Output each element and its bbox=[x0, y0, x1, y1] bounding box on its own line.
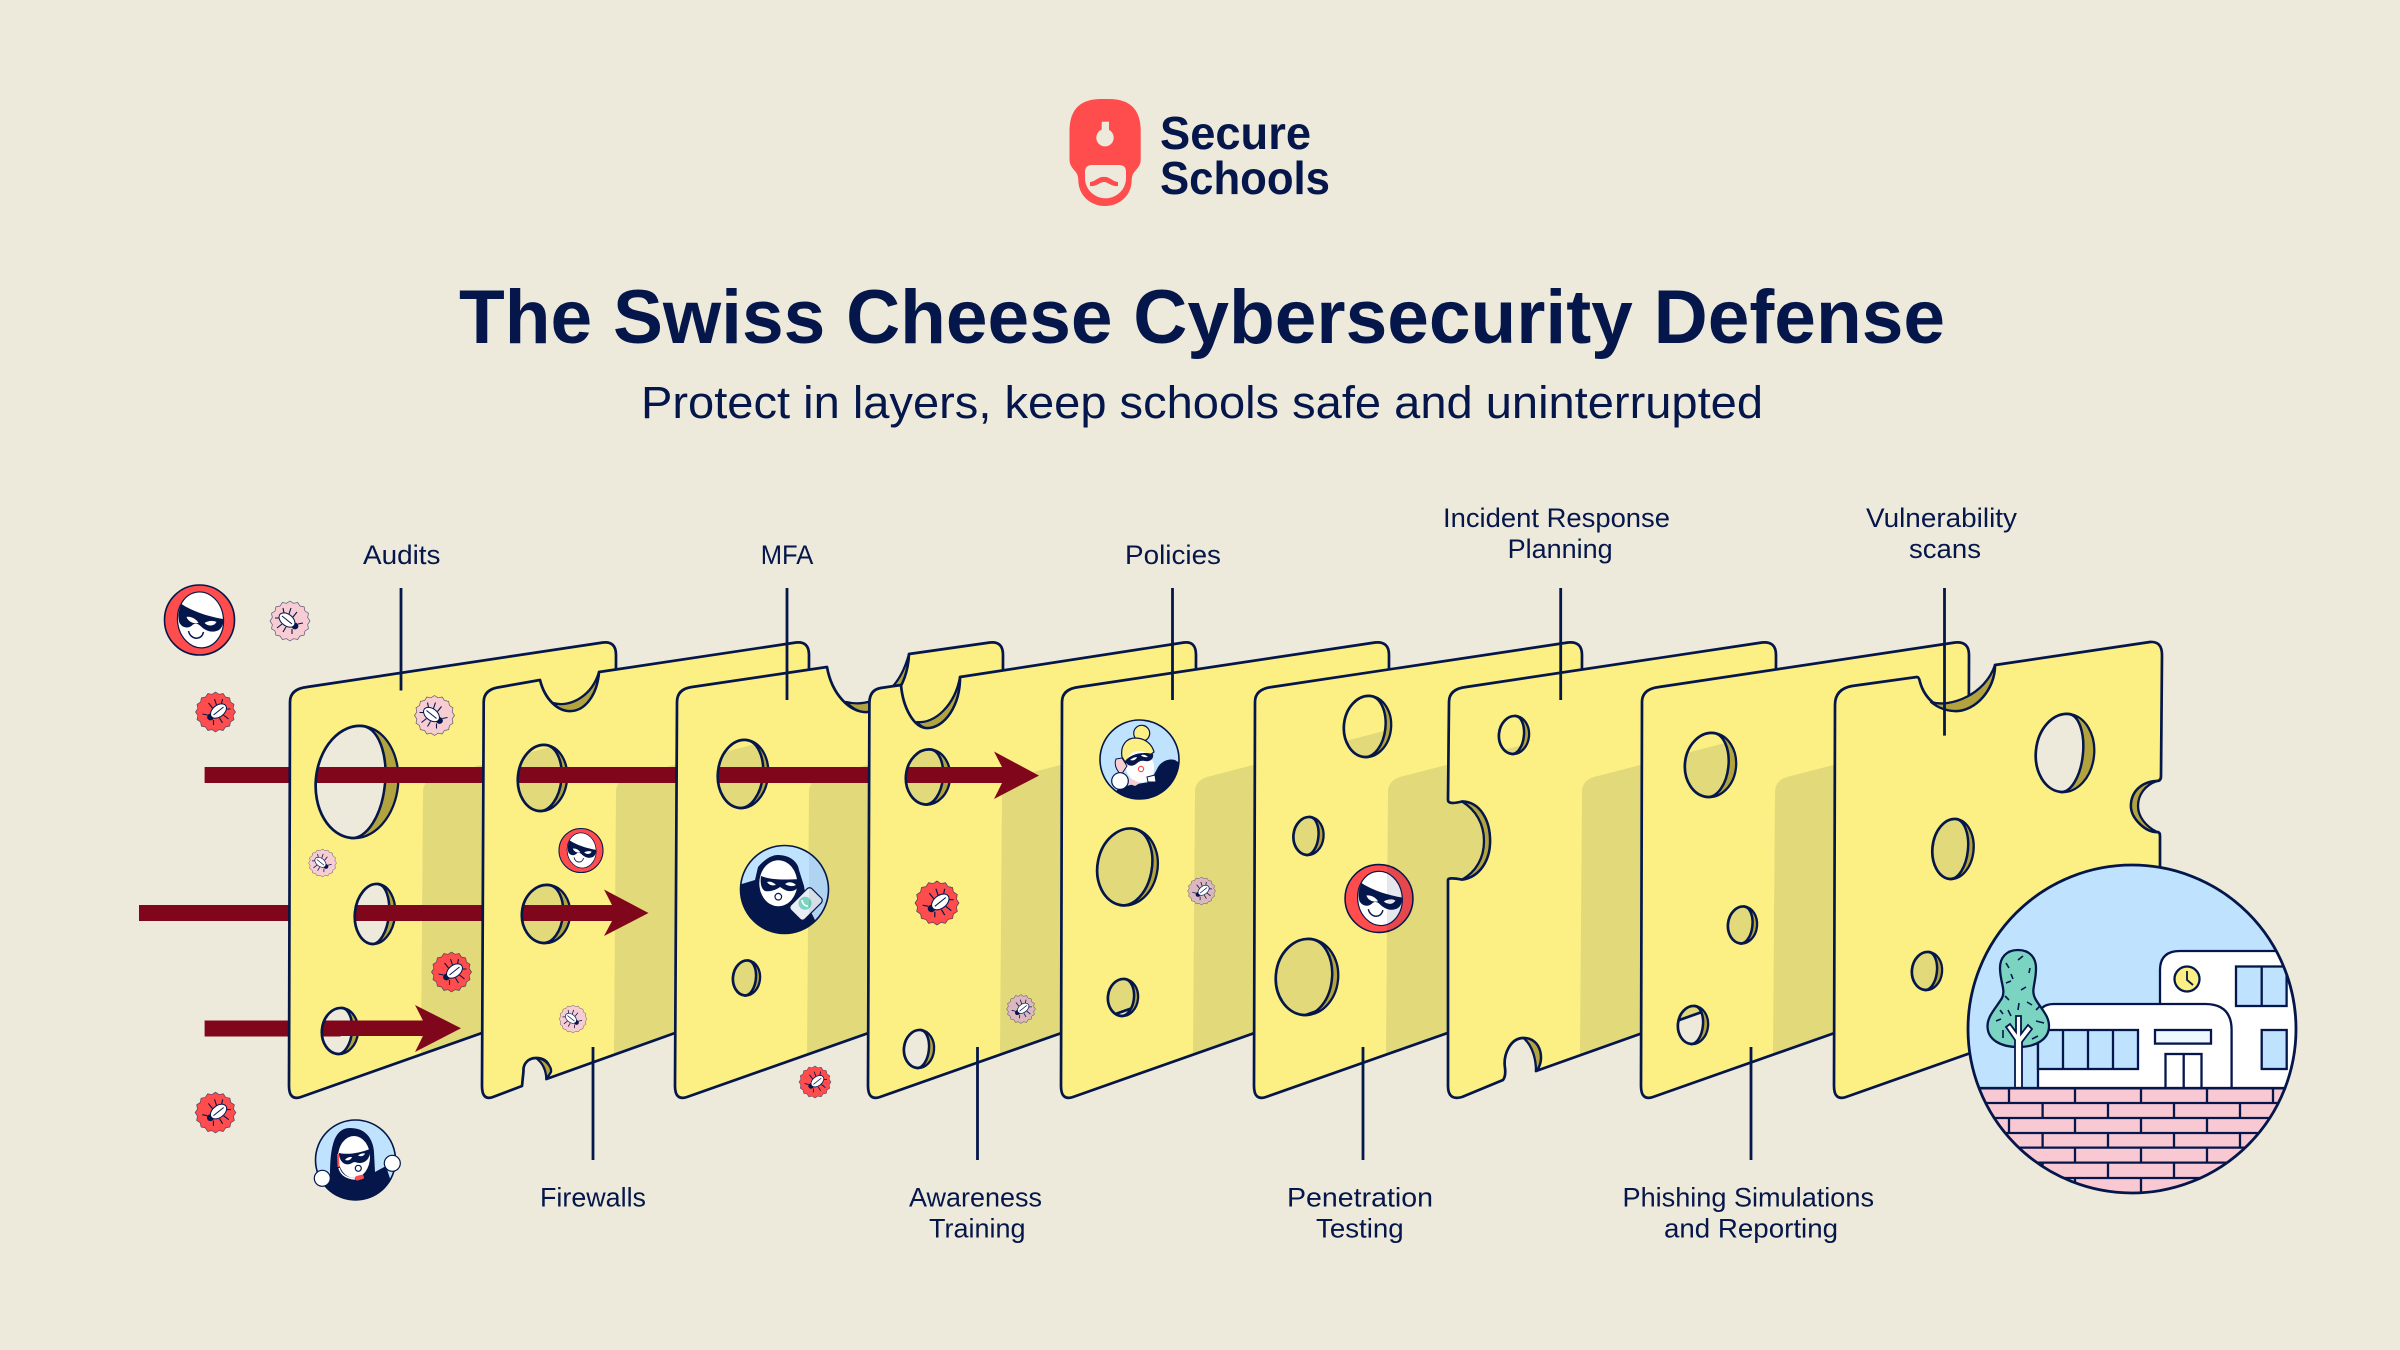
icon: bug red on awareness layer bbox=[915, 881, 959, 925]
label: Penetration Testing bbox=[1287, 1182, 1433, 1244]
label: Vulnerability scans: Vulnerability bbox=[1866, 503, 2018, 533]
cheese layer 7 bbox=[1448, 642, 1776, 1098]
icon: thief on firewalls layer bbox=[559, 828, 603, 873]
subtitle: Protect in layers, keep schools safe and uninterrupted bbox=[641, 377, 1763, 428]
label: Penetration Testing: Testing bbox=[1316, 1214, 1404, 1244]
arrow 3 entering bbox=[205, 1020, 341, 1036]
icon: thief top left bbox=[164, 585, 234, 655]
logo: Secure Schools: Secure bbox=[1160, 107, 1311, 159]
label: Phishing Simulations and Reporting bbox=[1622, 1182, 1874, 1244]
label: Awareness Training bbox=[909, 1182, 1042, 1244]
label: MFA: MFA bbox=[761, 540, 814, 570]
cheese layer 1 bbox=[289, 642, 616, 1098]
label: Phishing Simulations and Reporting: and Reporting bbox=[1664, 1214, 1838, 1244]
cheese layer 5 bbox=[1061, 642, 1389, 1098]
icon: bug shaded on awareness layer bbox=[1007, 995, 1035, 1023]
icon: thief with phone bbox=[735, 846, 828, 940]
label: Awareness Training: Training bbox=[929, 1214, 1026, 1244]
cheese layer 2 bbox=[482, 642, 809, 1098]
icon: bug pink top bbox=[270, 601, 310, 641]
icon: bug pink small bbox=[308, 849, 336, 877]
label: Vulnerability scans: scans bbox=[1909, 534, 1981, 564]
cheese layer 6 bbox=[1254, 642, 1582, 1098]
label: Firewalls: Firewalls bbox=[540, 1182, 646, 1212]
icon: bug red bottom bbox=[195, 1092, 236, 1133]
icon: bug red below MFA layer bbox=[799, 1066, 831, 1098]
illustration: school in circle bbox=[1960, 865, 2310, 1198]
icon: thief with headset bbox=[314, 1120, 400, 1210]
logo: Secure Schools: Schools bbox=[1160, 152, 1330, 204]
icon: blonde thief on phone bbox=[1099, 719, 1180, 800]
label: Incident Response Planning: Incident Response bbox=[1443, 503, 1670, 533]
logo: Secure Schools bbox=[1070, 99, 1330, 206]
label: Penetration Testing: Penetration bbox=[1287, 1182, 1433, 1212]
cheese layer 8 bbox=[1641, 642, 1969, 1098]
icon: bug pink on audits layer bbox=[414, 696, 454, 736]
arrow 2 entering bbox=[139, 905, 375, 921]
cheese layer 4 bbox=[868, 642, 1196, 1098]
arrows between layer 3 and 4 bbox=[745, 767, 927, 783]
icon: bug red top bbox=[196, 692, 236, 732]
icon: bug shaded on policies layer bbox=[1188, 877, 1216, 905]
cheese layer 9 bbox=[1834, 642, 2162, 1098]
arrow 1 entering bbox=[205, 767, 351, 783]
label: Incident Response Planning: Planning bbox=[1508, 534, 1613, 564]
arrows between layer 2 and 3 bbox=[540, 767, 745, 936]
label: Incident Response Planning bbox=[1443, 503, 1670, 564]
icon: thief on penetration layer bbox=[1345, 865, 1413, 932]
label: Audits: Audits bbox=[363, 540, 440, 570]
title: The Swiss Cheese Cybersecurity Defense bbox=[459, 275, 1945, 360]
label: Vulnerability scans bbox=[1866, 503, 2018, 564]
label: Awareness Training: Awareness bbox=[909, 1182, 1042, 1212]
cheese layer 3 bbox=[675, 642, 1003, 1098]
arrows between layer 1 and 2 bbox=[340, 767, 547, 1052]
icon: bug pink on firewalls layer bbox=[559, 1005, 587, 1033]
icon: bug red on audits layer bbox=[432, 952, 472, 992]
label: Policies: Policies bbox=[1125, 540, 1221, 570]
arrow head past awareness layer bbox=[925, 752, 1039, 799]
label lines bbox=[401, 588, 1944, 1160]
label: Phishing Simulations and Reporting: Phishing Simulations bbox=[1622, 1182, 1874, 1212]
